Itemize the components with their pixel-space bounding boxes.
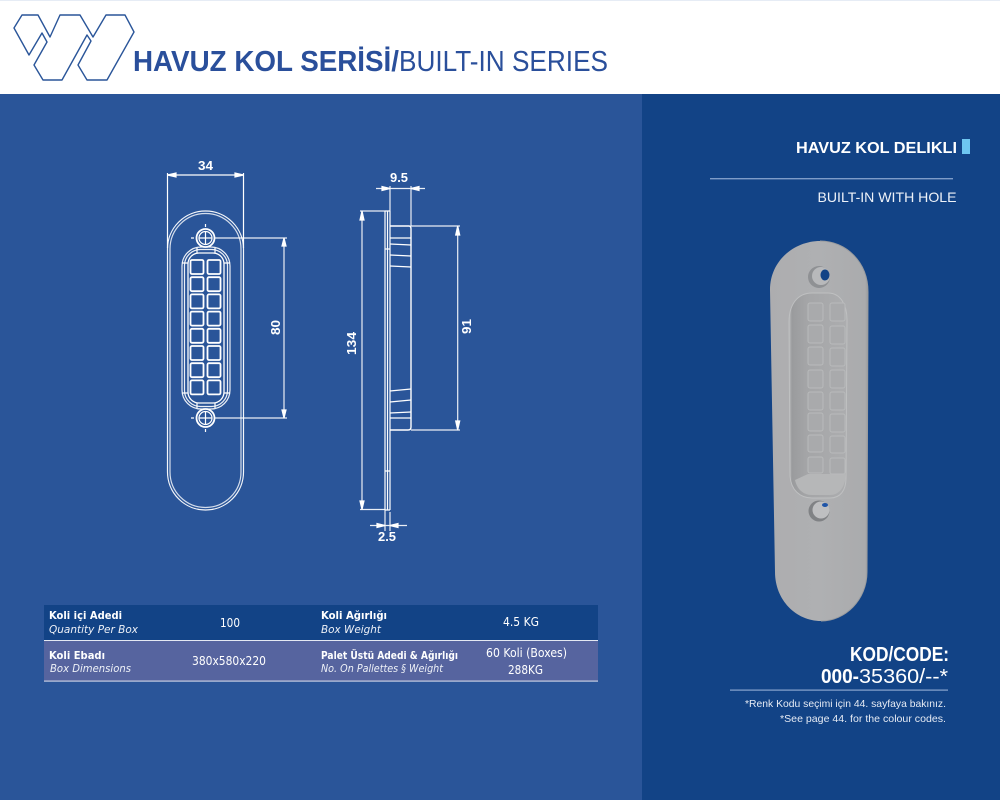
- recess squares: [808, 303, 845, 474]
- dimension 2.5: 2.5: [378, 529, 396, 544]
- table row 1: [44, 605, 598, 641]
- table row 2: [44, 641, 598, 682]
- product image: handle: [770, 241, 868, 621]
- grip squares: [190, 260, 220, 394]
- title: HAVUZ KOL SERİSİ/: [133, 46, 399, 78]
- plate outline: [168, 211, 244, 510]
- product heading: HAVUZ KOL DELIKLI: [796, 140, 957, 157]
- table row 2: Palet Üstü Adedi & Ağırlığı: [321, 648, 458, 662]
- icon: cyan marker: [962, 139, 970, 154]
- dimension 34: 34: [198, 158, 214, 173]
- dimension 134: [344, 211, 385, 510]
- plate: [770, 241, 868, 621]
- panel: technical drawing background: [0, 94, 642, 800]
- product code: 35360/--*: [859, 666, 948, 688]
- product code: KOD/CODE:: [850, 644, 949, 666]
- heading divider: [710, 178, 953, 179]
- table row 1: 4.5 KG: [503, 615, 539, 629]
- table row 1: 100: [220, 616, 240, 630]
- dimension 80: [215, 238, 287, 418]
- colour code note: *Renk Kodu seçimi için 44. sayfaya bakınız.: [745, 698, 946, 710]
- product code: [821, 644, 949, 688]
- product subheading: BUILT-IN WITH HOLE: [818, 189, 956, 205]
- dimension 2.5: [370, 510, 407, 544]
- table row 1: Quantity Per Box: [49, 623, 138, 636]
- table row 2: 288KG: [508, 663, 543, 677]
- table row 2: 60 Koli (Boxes): [486, 646, 567, 660]
- title: BUILT-IN SERIES: [399, 46, 608, 78]
- recess: [789, 293, 847, 498]
- dimension 34: [168, 158, 244, 248]
- title: [133, 46, 608, 78]
- logo: [14, 15, 134, 80]
- header band: [0, 0, 1000, 94]
- table row 1: Koli içi Adedi: [49, 609, 122, 622]
- table row 2: Box Dimensions: [50, 662, 131, 675]
- colour code note: [745, 698, 946, 725]
- table row 2: No. On Pallettes § Weight: [321, 663, 444, 675]
- code divider: [730, 690, 948, 691]
- bottom screw hole: [191, 409, 214, 432]
- top screw hole: [808, 266, 830, 288]
- front view technical drawing: [168, 158, 287, 510]
- specification table: [44, 605, 598, 682]
- recess outline: [182, 247, 230, 409]
- dimension 91: 91: [459, 319, 474, 334]
- dimension 91: [411, 226, 474, 430]
- side profile: [385, 211, 411, 510]
- product code: 000-: [821, 666, 859, 688]
- side view technical drawing: [344, 170, 474, 544]
- panel: product background: [642, 94, 1000, 800]
- dimension 9.5: [376, 170, 425, 226]
- top screw hole: [191, 224, 214, 247]
- colour code note: *See page 44. for the colour codes.: [780, 713, 946, 725]
- dimension 134: 134: [344, 331, 359, 355]
- table row 1: Box Weight: [321, 623, 382, 636]
- dimension 80: 80: [268, 320, 283, 335]
- table row 2: Koli Ebadı: [49, 649, 105, 662]
- dimension 9.5: 9.5: [390, 170, 408, 185]
- table row 1: Koli Ağırlığı: [321, 609, 387, 622]
- bottom screw hole: [808, 500, 830, 522]
- table row 2: 380x580x220: [192, 654, 266, 668]
